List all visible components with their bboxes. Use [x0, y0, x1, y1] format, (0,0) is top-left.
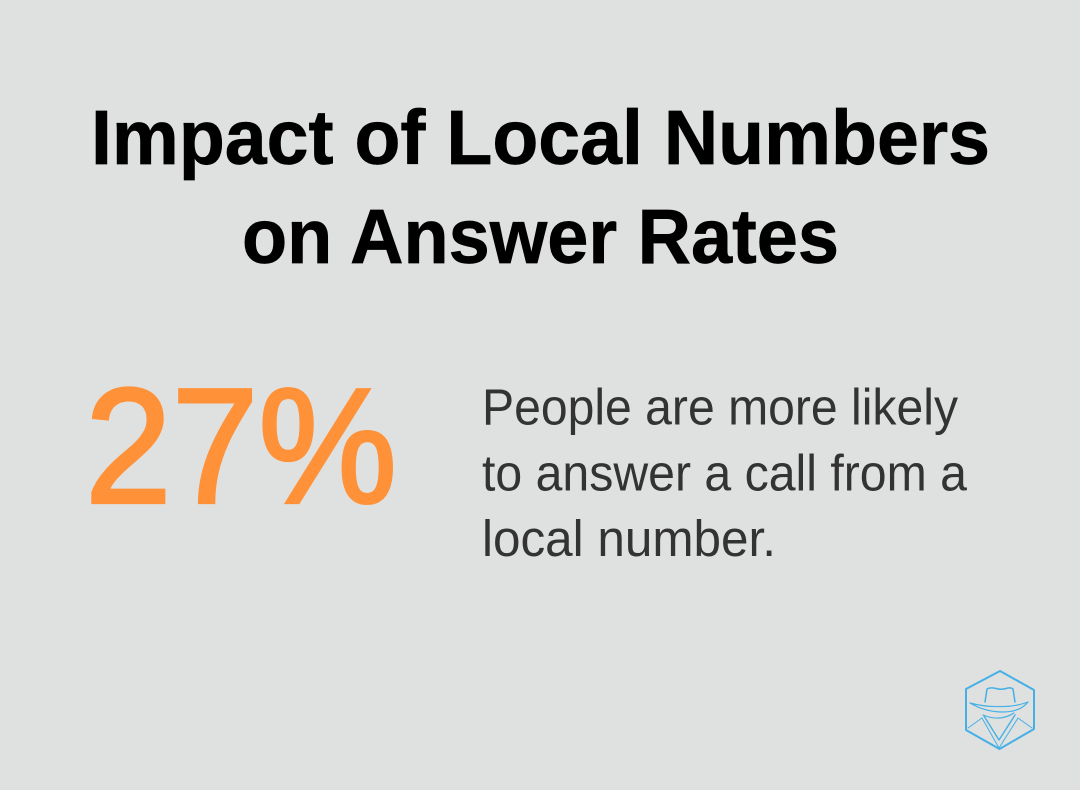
big statistic: 27%: 27%	[85, 354, 397, 538]
description text: People are more likely	[482, 378, 958, 436]
title	[91, 95, 990, 280]
title: on Answer Rates	[242, 194, 839, 280]
icon: logo hexagon with spy hat	[966, 671, 1034, 749]
description text: local number.	[482, 510, 776, 567]
description text	[482, 378, 968, 567]
description text: to answer a call from a	[482, 444, 968, 502]
title: Impact of Local Numbers	[91, 95, 990, 181]
